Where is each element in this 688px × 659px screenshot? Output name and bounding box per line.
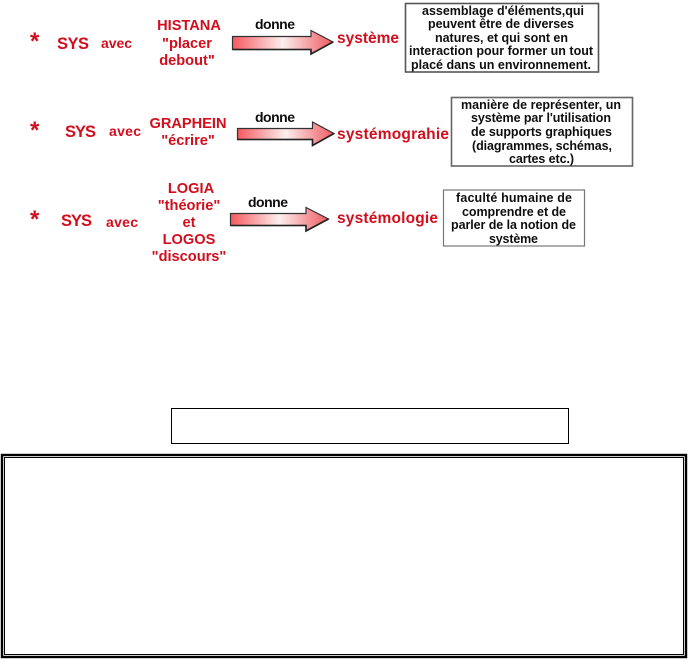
definition box: systémologie: parler de la notion de [451,218,576,232]
bullet asterisk: * [30,28,40,55]
arrow [232,30,333,54]
root word GRAPHEIN [149,116,227,149]
root word HISTANA: "placer [162,36,212,52]
root words LOGIA and LOGOS [152,181,226,265]
row 2: systémographie [30,98,632,166]
root word HISTANA [157,18,221,69]
empty framed panel [2,455,686,657]
SYS label: SYS [61,212,92,230]
row 3: systémologie [30,181,584,265]
definition box: systémographie: système par l'utilisation [471,111,611,125]
bullet asterisk: * [30,117,40,144]
definition box: système [406,4,598,72]
SYS label: SYS [57,35,89,53]
bullet asterisk: * [30,206,40,233]
avec label: avec [106,214,138,230]
root word HISTANA: debout" [159,53,215,69]
root words LOGIA and LOGOS: LOGIA [168,181,215,197]
arrow [238,122,334,146]
definition box: système: placé dans un environnement. [411,58,591,72]
definition box: systémographie [452,98,632,166]
donne label: donne [255,109,295,125]
definition box: système: peuvent être de diverses [428,17,574,31]
definition box: système: natures, et qui sont en [435,31,568,45]
donne label: donne [248,194,288,210]
empty title box [172,408,568,444]
result word: systémograhie: systémograhie [337,126,449,143]
definition box: système: interaction pour former un tout [409,44,594,58]
avec label: avec [109,123,141,139]
result word: systémologie: systémologie [337,210,438,227]
definition box: systémologie [444,190,584,246]
arrow [230,208,328,231]
definition box: système: assemblage d'éléments,qui [422,4,584,18]
avec label: avec [101,35,132,51]
root word GRAPHEIN: GRAPHEIN [149,116,227,132]
definition box: systémologie: comprendre et de [462,205,566,219]
root words LOGIA and LOGOS: et [183,215,196,231]
definition box: systémographie: (diagrammes, schémas, [472,139,612,153]
donne label: donne [255,16,295,32]
root word GRAPHEIN: "écrire" [161,133,215,149]
definition box: systémographie: cartes etc.) [509,152,574,166]
row 1: système [30,4,598,72]
root words LOGIA and LOGOS: "discours" [152,249,226,265]
root words LOGIA and LOGOS: "théorie" [158,198,220,214]
definition box: systémologie: faculté humaine de [456,191,572,205]
result word: système: système [337,30,399,47]
root word HISTANA: HISTANA [157,18,221,34]
definition box: systémographie: manière de représenter, un [461,98,621,112]
definition box: systémologie: système [489,232,538,246]
SYS label: SYS [65,123,96,141]
definition box: systémographie: de supports graphiques [471,125,612,139]
root words LOGIA and LOGOS: LOGOS [163,232,216,248]
